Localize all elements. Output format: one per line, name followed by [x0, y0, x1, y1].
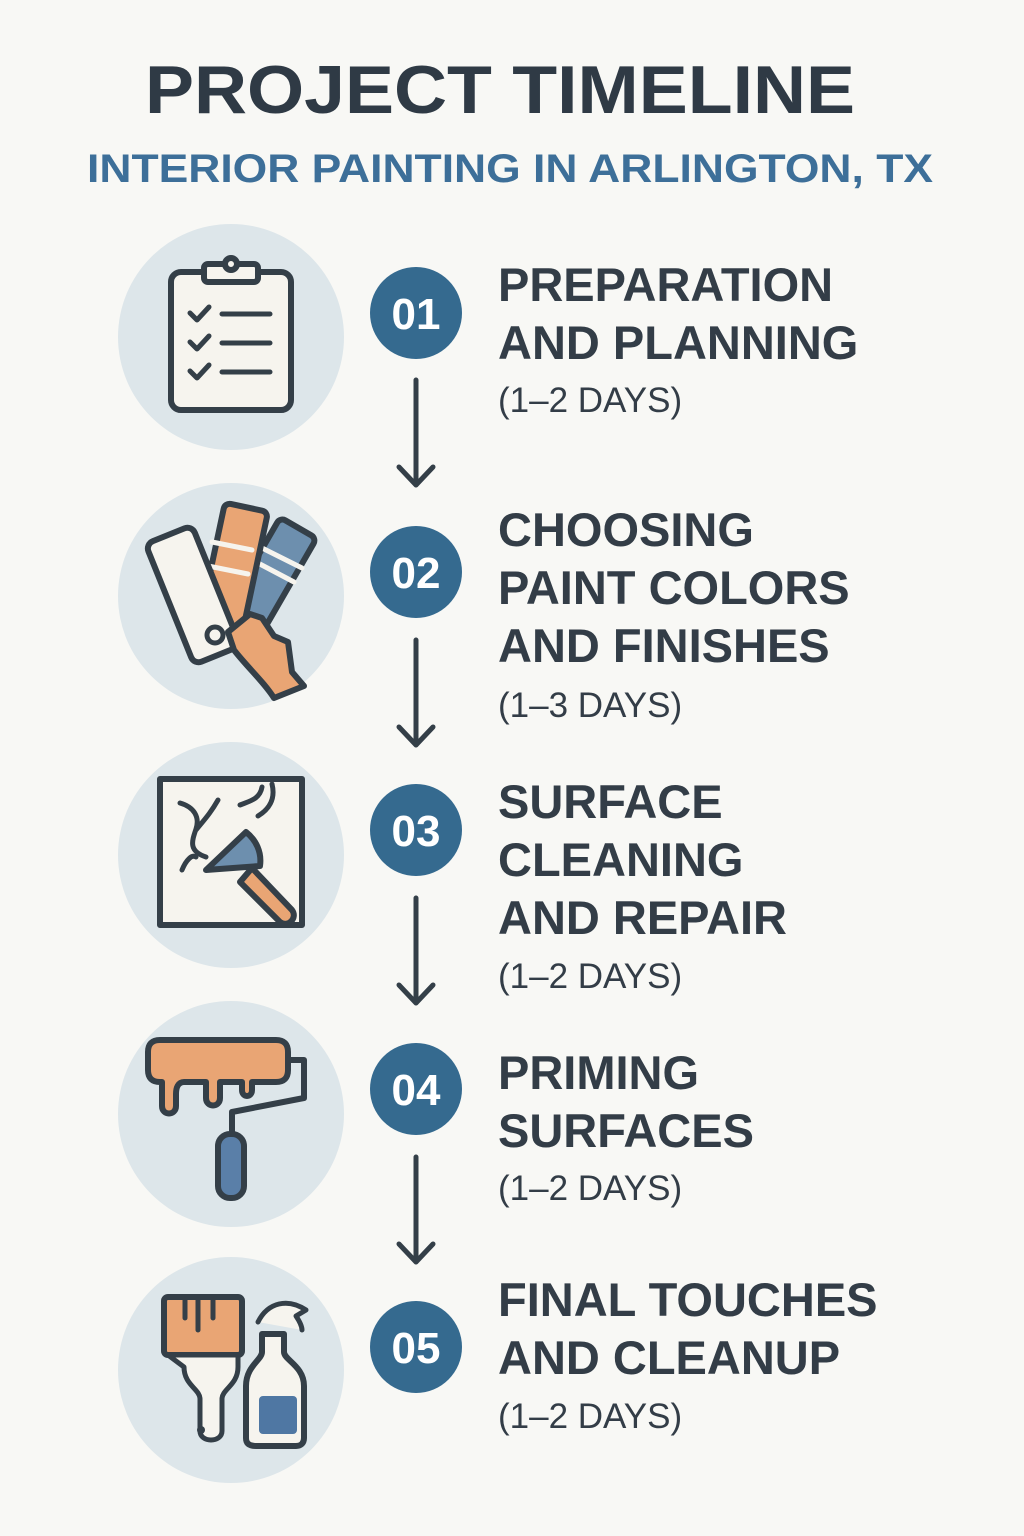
title: PROJECT TIMELINE	[145, 52, 855, 128]
step 3 text: (1–2 DAYS)	[498, 957, 682, 996]
number badges: 01	[392, 290, 440, 339]
step 3 text: AND REPAIR	[498, 891, 787, 944]
arrows	[399, 380, 433, 1262]
icon: clipboard	[118, 224, 344, 450]
step 5 text: (1–2 DAYS)	[498, 1397, 682, 1436]
step 2 text: CHOOSING	[498, 503, 754, 556]
number badges: 04	[392, 1066, 441, 1115]
step 4 text: PRIMING	[498, 1046, 699, 1099]
subtitle: INTERIOR PAINTING IN ARLINGTON, TX	[87, 147, 933, 191]
step 4 text	[498, 1046, 754, 1208]
step 2 text: PAINT COLORS	[498, 561, 850, 614]
number badges	[370, 267, 462, 1393]
step 3 text: SURFACE	[498, 775, 723, 828]
arrow 1	[399, 380, 433, 485]
icon: paint roller	[118, 1001, 344, 1227]
step 2 text	[498, 503, 850, 725]
step 2 text: AND FINISHES	[498, 619, 830, 672]
step 1 text	[498, 258, 858, 420]
step 1 text: PREPARATION	[498, 258, 833, 311]
step 1 text: AND PLANNING	[498, 316, 858, 369]
icon: paint swatches in hand	[118, 483, 344, 709]
arrow 3	[399, 898, 433, 1003]
icon: brush and spray bottle	[118, 1257, 344, 1483]
arrow 4	[399, 1157, 433, 1262]
icon: wall repair	[118, 742, 344, 968]
step 5 text: FINAL TOUCHES	[498, 1273, 878, 1326]
step 3 text: CLEANING	[498, 833, 743, 886]
step 5 text	[498, 1273, 878, 1436]
number badges: 02	[392, 549, 440, 598]
step 4 text: SURFACES	[498, 1104, 754, 1157]
step 5 text: AND CLEANUP	[498, 1331, 840, 1384]
step 3 text	[498, 775, 787, 996]
step 4 text: (1–2 DAYS)	[498, 1169, 682, 1208]
arrow 2	[399, 640, 433, 745]
number badges: 03	[392, 807, 440, 856]
number badges: 05	[392, 1324, 440, 1373]
step 1 text: (1–2 DAYS)	[498, 381, 682, 420]
step 2 text: (1–3 DAYS)	[498, 686, 682, 725]
